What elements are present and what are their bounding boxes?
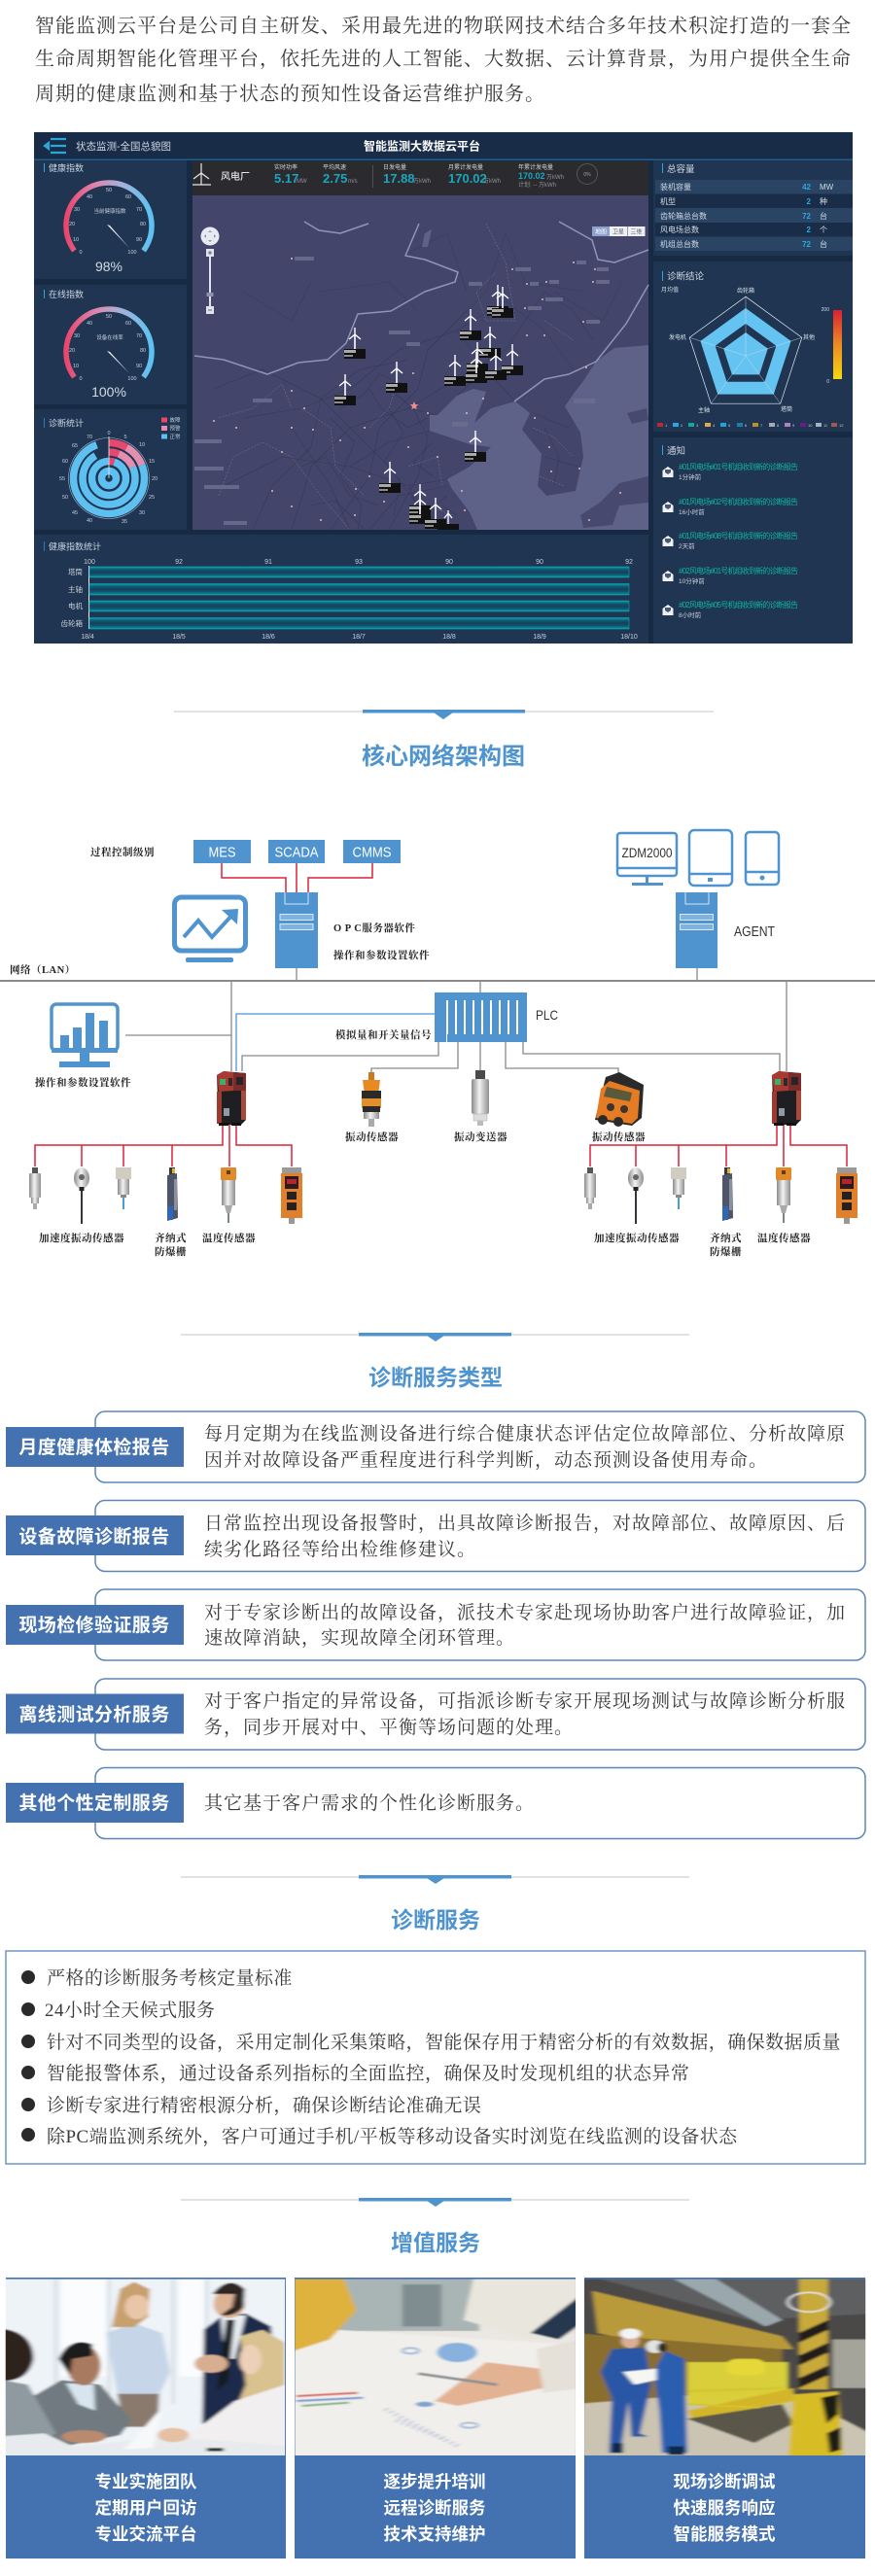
panel: diagnosis conclusion radar: [653, 261, 853, 432]
dashboard header: 状态监测-全国总貌图: [76, 140, 171, 153]
map top statistics bar: m/s: [348, 179, 358, 185]
panel: diagnosis conclusion radar: 月均值: [661, 286, 679, 294]
map top statistics bar: [192, 161, 648, 195]
radar legend: [657, 423, 844, 428]
radar legend: 2: [681, 423, 683, 428]
radar legend: 11: [823, 423, 828, 428]
panel: diagnosis service list: 24小时全天候式服务: [45, 2000, 216, 2021]
panel: notifications: 1分钟前: [679, 472, 702, 481]
radar chart: 主轴: [698, 406, 710, 414]
panel: online index gauge: 40: [87, 321, 92, 327]
panel: diagnosis statistics radial chart: 25: [149, 495, 155, 501]
service type: offline test: 离线测试分析服务: [18, 1703, 170, 1725]
panel: diagnosis statistics radial chart: 40: [87, 518, 92, 524]
card: professional team: [0, 2272, 297, 2559]
panel: total capacity table: 个: [820, 226, 827, 234]
panel: health index gauge: 10: [73, 237, 79, 243]
panel: health index statistics bars: 健康指数统计: [49, 540, 101, 552]
panel: health index statistics bars: 91: [264, 559, 272, 566]
panel: health index statistics bars: 18/7: [352, 634, 366, 641]
icon: trend monitor: [175, 897, 245, 962]
heading: diagnosis service types: 诊断服务类型: [368, 1365, 503, 1390]
heading: diagnosis service: 诊断服务: [391, 1907, 480, 1932]
card text: [673, 2472, 776, 2544]
label: vibration sensor 2: 振动传感器: [592, 1131, 646, 1143]
card text: 专业实施团队: [95, 2472, 197, 2491]
panel: online index gauge: 60: [125, 321, 131, 327]
right sensor row: [584, 1167, 858, 1224]
radar chart: 齿轮箱: [737, 287, 754, 295]
panel: online index gauge: 100%: [91, 384, 126, 400]
radar legend: 7: [760, 423, 763, 428]
map type tabs: 卫星: [612, 229, 624, 235]
map top statistics bar: 2.75: [323, 171, 347, 186]
photo: workers in plant: [584, 2279, 865, 2455]
panel: online index gauge: [34, 285, 187, 404]
panel: health index statistics bars: 92: [175, 559, 183, 566]
panel: health index gauge: 100: [127, 250, 137, 256]
intro paragraph: 生命周期智能化管理平台，依托先进的人工智能、大数据、云计算背景，为用户提供全生命: [35, 48, 852, 70]
panel: notifications: #01风电场#02号机组收到新的诊断报告: [679, 497, 798, 506]
panel: diagnosis statistics radial chart: 55: [59, 476, 65, 482]
panel: online index gauge: 20: [69, 348, 75, 354]
service type: offline test: 务，同步开展对中、平衡等场问题的处理。: [204, 1717, 574, 1738]
panel: health index statistics bars: 主轴: [68, 584, 83, 594]
panel: health index statistics bars: 18/4: [81, 634, 94, 641]
PLC unit: [435, 992, 527, 1042]
radar legend: 8: [777, 423, 780, 428]
panel: health index statistics bars: [34, 535, 648, 644]
panel: diagnosis statistics radial chart: 5: [123, 435, 127, 440]
dashboard screenshot: [34, 132, 853, 644]
radar legend: 5: [728, 423, 731, 428]
panel: health index statistics bars: 18/5: [172, 634, 186, 641]
left sensor row: [29, 1167, 302, 1224]
panel: diagnosis statistics radial chart: 诊断统计: [49, 418, 84, 428]
panel: online index gauge: 70: [136, 333, 142, 339]
map wind turbine markers: [334, 285, 523, 530]
box: CMMS: [343, 840, 401, 863]
map city name labels: [194, 257, 610, 525]
service type: on-site verification: [6, 1589, 865, 1660]
left sensor labels: 防爆栅: [155, 1245, 187, 1258]
panel: online index gauge: 在线指数: [49, 289, 84, 299]
panel: diagnosis statistics radial chart: 正常: [169, 433, 181, 440]
panel: diagnosis service list: 智能报警体系，通过设备系列指标的全面监控，确保及时发现机组的状态异常: [47, 2063, 689, 2084]
right sensor labels: 加速度振动传感器: [594, 1232, 680, 1244]
panel: online index gauge: 30: [74, 333, 80, 339]
panel: diagnosis service list: 严格的诊断服务考核定量标准: [47, 1967, 293, 1989]
card text: 技术支持维护: [383, 2524, 486, 2544]
panel: online index gauge: 50: [106, 314, 112, 320]
panel: notifications: 通知: [667, 445, 685, 457]
radar legend: 3: [696, 423, 699, 428]
left sensor labels: [39, 1232, 256, 1258]
panel: online index gauge: 10: [73, 364, 79, 369]
panel: total capacity table: MW: [820, 183, 834, 191]
panel: health index statistics bars: 90: [536, 559, 543, 566]
panel: online index gauge: 设备在线率: [96, 333, 123, 341]
panel: total capacity table: 风电场总数: [660, 225, 699, 234]
service type: monthly report: 因并对故障设备严重程度进行科学判断，动态预测设备使用寿命。: [204, 1449, 768, 1471]
section divider: value added: [181, 2198, 689, 2207]
map top statistics bar: 月累计发电量: [448, 163, 483, 171]
panel: total capacity table: 总容量: [667, 163, 695, 175]
panel: health index gauge: 0: [79, 250, 83, 256]
panel: health index gauge: 70: [136, 207, 142, 213]
left sensor labels: 温度传感器: [202, 1232, 256, 1244]
panel: total capacity table: 种: [820, 196, 827, 206]
icon: phone: [746, 832, 779, 885]
box: MES: [193, 840, 251, 863]
OPC server software label: O P C服务器软件: [333, 922, 415, 934]
panel: health index gauge: 50: [106, 188, 112, 193]
network cabling: [0, 863, 875, 1166]
panel: health index gauge: 98%: [95, 259, 122, 274]
map top statistics bar: 万kWh: [546, 174, 564, 181]
box: SCADA: [268, 840, 325, 863]
box: CMMS: CMMS: [352, 844, 391, 861]
panel: health index statistics bars: 18/9: [533, 634, 546, 641]
panel: notifications: #01风电场#08号机组收到新的诊断报告: [679, 531, 798, 540]
panel: total capacity table: 72: [802, 240, 812, 249]
map top statistics bar: 年累计发电量: [518, 163, 553, 171]
card text: [383, 2472, 486, 2544]
panel: notifications: 8小时前: [679, 610, 702, 619]
panel: total capacity table: 72: [802, 212, 812, 221]
map top statistics bar: 实时功率: [274, 163, 298, 171]
card: remote diagnosis: [284, 2272, 586, 2559]
panel: health index gauge: 20: [69, 222, 75, 227]
icon: desktop ZDM2000: [617, 833, 677, 885]
service type: fault report: 设备故障诊断报告: [18, 1525, 170, 1548]
panel: notifications: [653, 437, 853, 644]
section divider: diagnosis types: [181, 1333, 689, 1341]
process control level label: 过程控制级别: [90, 846, 155, 858]
service type: custom: 其他个性定制服务: [18, 1792, 170, 1814]
panel: health index statistics bars: 18/6: [262, 634, 275, 641]
panel: health index statistics bars: 齿轮箱: [60, 618, 83, 628]
panel: health index gauge: 当前健康指数: [93, 207, 126, 215]
radar colour scale: [822, 307, 842, 385]
map top statistics bar: 平均风速: [323, 163, 346, 171]
panel: diagnosis statistics radial chart: 15: [149, 459, 155, 465]
service type: fault report: [6, 1501, 865, 1571]
radar chart: 发电机: [669, 333, 686, 341]
panel: notifications: #02风电场#01号机组收到新的诊断报告: [679, 566, 798, 575]
service type: monthly report: [6, 1411, 865, 1482]
card text: [95, 2472, 197, 2544]
photo: business team: [6, 2279, 286, 2455]
radar colour scale: 0: [826, 379, 829, 385]
radar legend: 10: [808, 423, 813, 428]
operation software label: 操作和参数设置软件: [333, 949, 430, 961]
panel: notifications: 2天前: [679, 541, 695, 550]
panel: diagnosis statistics radial chart: 10: [139, 442, 145, 448]
service type: monthly report: 月度健康体检报告: [18, 1436, 170, 1458]
service type: custom: [6, 1767, 865, 1839]
panel: total capacity table: 机型: [660, 196, 676, 206]
label: vibration sensor 1: 振动传感器: [345, 1131, 399, 1143]
panel: total capacity table: 装机容量: [660, 182, 691, 191]
operation software label left: 操作和参数设置软件: [35, 1076, 131, 1089]
panel: health index gauge: 30: [74, 207, 80, 213]
card text: 逐步提升培训: [383, 2472, 486, 2491]
panel: total capacity table: 齿轮箱总台数: [660, 211, 707, 221]
service type: offline test: 对于客户指定的异常设备，可指派诊断专家开展现场测试与故障诊断分析服: [204, 1690, 846, 1712]
map top statistics bar: 计划: -- 万kWh: [518, 181, 556, 189]
sensor: orange vibration: [362, 1072, 381, 1127]
heading: value added services: 增值服务: [391, 2230, 480, 2255]
panel: diagnosis statistics radial chart: 70: [87, 435, 92, 440]
panel: diagnosis service list: 针对不同类型的设备，采用定制化采集策略，智能保存用于精密分析的有效数据，确保数据质量: [47, 2032, 841, 2053]
service type: fault report: 日常监控出现设备报警时，出具故障诊断报告，对故障部位、故障原因、后: [204, 1513, 846, 1534]
map top statistics bar: 5.17: [274, 171, 298, 186]
panel: notifications: #01风电场#01号机组收到新的诊断报告: [679, 462, 798, 471]
section divider: network: [174, 710, 714, 719]
service type: on-site verification: 速故障消缺，实现故障全闭环管理。: [204, 1627, 515, 1649]
map type tabs: 地图: [595, 227, 607, 235]
map top statistics bar: MW: [297, 179, 307, 185]
panel: diagnosis statistics radial chart: 60: [62, 459, 68, 465]
panel: health index gauge: 90: [136, 237, 142, 243]
panel: diagnosis service list: 除PC端监测系统外，客户可通过手机/平板等移动设备实时浏览在线监测的设备状态: [47, 2126, 738, 2147]
panel: diagnosis statistics radial chart: 30: [139, 510, 145, 516]
panel: diagnosis service list: 诊断专家进行精密根源分析，确保诊断结论准确无误: [47, 2095, 481, 2116]
radar legend: 1: [665, 423, 668, 428]
radar legend: 9: [792, 423, 795, 428]
panel: total capacity table: 台: [820, 239, 827, 249]
panel: diagnosis statistics radial chart: 35: [122, 519, 127, 525]
panel: health index statistics bars: 93: [355, 559, 363, 566]
intro paragraph: [35, 15, 852, 105]
panel: notifications: #02风电场#05号机组收到新的诊断报告: [679, 600, 798, 609]
panel: online index gauge: 80: [140, 348, 146, 354]
panel: health index statistics bars: 92: [625, 559, 633, 566]
icon: desktop ZDM2000: ZDM2000: [622, 845, 673, 860]
map top statistics bar: 17.88: [383, 171, 415, 186]
map top statistics bar: 170.02: [448, 171, 487, 186]
AGENT label: AGENT: [734, 923, 775, 940]
panel: diagnosis statistics radial chart: 预警: [169, 424, 181, 432]
panel: total capacity table: 2: [807, 226, 812, 234]
panel: diagnosis statistics radial chart: 45: [72, 510, 78, 516]
panel: diagnosis statistics radial chart: 20: [152, 476, 158, 482]
panel: online index gauge: 90: [136, 364, 142, 369]
panel: health index statistics bars: 100: [84, 559, 95, 566]
intro paragraph: 智能监测云平台是公司自主研发、采用最先进的物联网技术结合多年技术积淀打造的一套全: [35, 15, 852, 37]
radar legend: 4: [713, 423, 716, 428]
panel: total capacity table: 2: [807, 197, 812, 206]
radar legend: 6: [745, 423, 748, 428]
panel: health index statistics bars: 18/8: [442, 634, 456, 641]
card text: 智能服务模式: [673, 2524, 776, 2544]
radar chart: 其他: [803, 333, 815, 341]
radar legend: 12: [839, 423, 844, 428]
panel: health index statistics bars: 18/10: [620, 634, 638, 641]
dashboard header: 智能监测大数据云平台: [364, 138, 480, 154]
network LAN label: 网络（LAN）: [10, 963, 76, 976]
panel: diagnosis statistics radial chart: 故障: [169, 416, 181, 424]
service type: custom: 其它基于客户需求的个性化诊断服务。: [204, 1793, 535, 1814]
panel: health index statistics bars: 电机: [68, 601, 83, 610]
panel: health index gauge: [34, 160, 187, 279]
panel: notifications: 10分钟前: [679, 576, 705, 585]
left sensor labels: 齐纳式: [155, 1232, 187, 1244]
map top statistics bar: 170.02: [518, 171, 545, 181]
panel: health index gauge: 健康指数: [49, 162, 84, 173]
right sensor labels: 温度传感器: [757, 1232, 811, 1244]
panel: health index gauge: 60: [125, 194, 131, 200]
map borders: [194, 222, 648, 401]
PLC label: PLC: [536, 1007, 558, 1023]
map top statistics bar: 0%: [583, 172, 591, 178]
panel: total capacity table: [653, 160, 853, 256]
panel: online index gauge: 0: [79, 376, 83, 382]
card: on-site diagnosis: [574, 2272, 875, 2559]
map type tabs: 三维: [630, 227, 643, 235]
panel: health index gauge: 40: [87, 194, 92, 200]
dashboard header: [34, 132, 853, 160]
photo: charts on paper: [295, 2279, 576, 2455]
map city markers: [213, 258, 621, 521]
controller left: [217, 1071, 246, 1126]
sensor: silver transmitter: [472, 1070, 489, 1126]
icon: tablet: [689, 830, 732, 886]
box: MES: MES: [208, 844, 235, 861]
panel: diagnosis statistics radial chart: 0: [107, 431, 111, 436]
sensor: orange box with display: [595, 1072, 644, 1127]
service type: monthly report: 每月定期为在线监测设备进行综合健康状态评估定位故障部位、分析故障原: [204, 1423, 846, 1445]
panel: health index statistics bars: 90: [445, 559, 453, 566]
intro paragraph: 周期的健康监测和基于状态的预知性设备运营维护服务。: [35, 83, 545, 105]
map top statistics bar: 万kWh: [413, 178, 431, 185]
label: vibration transmitter: 振动变送器: [454, 1131, 508, 1143]
server: OPC: [275, 892, 318, 968]
panel: total capacity table: 台: [820, 211, 827, 221]
service type: offline test: [6, 1679, 865, 1750]
network architecture diagram: [0, 830, 875, 1258]
card text: 快速服务响应: [673, 2498, 776, 2518]
map top statistics bar: 万kWh: [483, 178, 501, 185]
controller right: [772, 1071, 801, 1126]
panel: diagnosis service list: [6, 1951, 865, 2164]
service type: fault report: 续劣化路径等给出检维修建议。: [204, 1539, 476, 1560]
section divider: diagnosis service: [181, 1875, 689, 1884]
map type tabs: [592, 226, 646, 236]
right sensor labels: 防爆栅: [710, 1245, 742, 1258]
service type: on-site verification: 对于专家诊断出的故障设备，派技术专家赴现场协助客户进行故障验证，加: [204, 1602, 846, 1623]
card text: 专业交流平台: [95, 2524, 196, 2544]
panel: notifications: 16小时前: [679, 507, 705, 516]
map top statistics bar: 风电厂: [221, 170, 250, 183]
left sensor labels: 加速度振动传感器: [39, 1232, 124, 1244]
panel: diagnosis statistics radial chart: 65: [72, 443, 78, 449]
radar chart: [669, 287, 815, 414]
panel: diagnosis conclusion radar: 诊断结论: [667, 270, 705, 282]
right sensor labels: 齐纳式: [710, 1232, 742, 1244]
panel: diagnosis statistics radial chart: 50: [62, 495, 68, 501]
panel: total capacity table: 42: [802, 183, 812, 191]
heading: core network architecture: 核心网络架构图: [362, 743, 525, 770]
map islands: [580, 408, 648, 528]
panel: total capacity table: 机组总台数: [660, 239, 699, 249]
right sensor labels: [594, 1232, 811, 1258]
radar colour scale: 200: [822, 307, 829, 313]
box: SCADA: SCADA: [274, 844, 319, 861]
card text: 定期用户回访: [95, 2498, 196, 2518]
panel: health index statistics bars: 塔筒: [68, 567, 83, 576]
icon: bar chart monitor: [52, 1004, 118, 1067]
panel: map: [192, 161, 648, 530]
service type: on-site verification: 现场检修验证服务: [18, 1614, 170, 1636]
card text: 远程诊断服务: [383, 2498, 486, 2518]
panel: diagnosis statistics radial chart: [34, 409, 187, 530]
map top statistics bar: 日发电量: [383, 163, 406, 171]
map zoom control: [200, 227, 220, 314]
panel: online index gauge: 100: [127, 376, 137, 382]
server: AGENT: [676, 892, 718, 968]
card text: 现场诊断调试: [673, 2472, 776, 2491]
map capital star marker: [410, 401, 418, 409]
radar chart: 塔筒: [781, 405, 792, 413]
map sea: [430, 345, 648, 530]
analog and switch signal label: 模拟量和开关量信号: [335, 1028, 432, 1041]
panel: health index gauge: 80: [140, 222, 146, 227]
